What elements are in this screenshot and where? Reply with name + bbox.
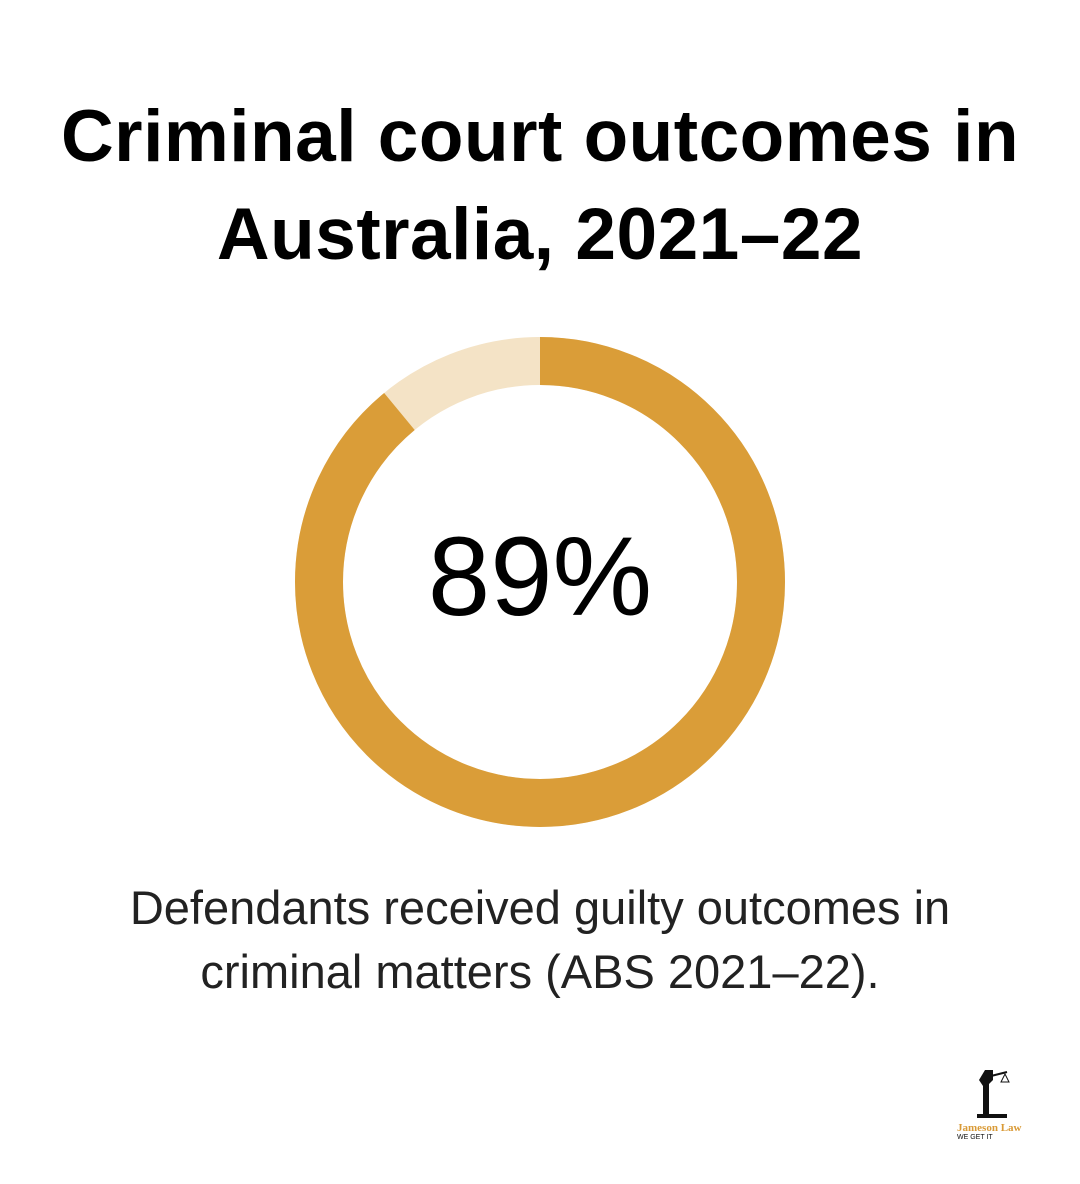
donut main segment 89%	[319, 361, 761, 803]
logo	[957, 1070, 1022, 1141]
big number: 89%	[428, 514, 652, 639]
description text: Defendants received guilty outcomes in	[130, 881, 950, 934]
donut background segment	[319, 361, 761, 803]
icon: lady justice	[977, 1070, 1010, 1118]
description text	[130, 881, 950, 998]
logo: WE GET IT	[957, 1134, 993, 1141]
title	[61, 96, 1019, 275]
title: Australia, 2021–22	[217, 194, 863, 275]
title: Criminal court outcomes in	[61, 96, 1019, 177]
logo text: Jameson Law	[957, 1122, 1021, 1134]
description text: criminal matters (ABS 2021–22).	[200, 945, 880, 998]
